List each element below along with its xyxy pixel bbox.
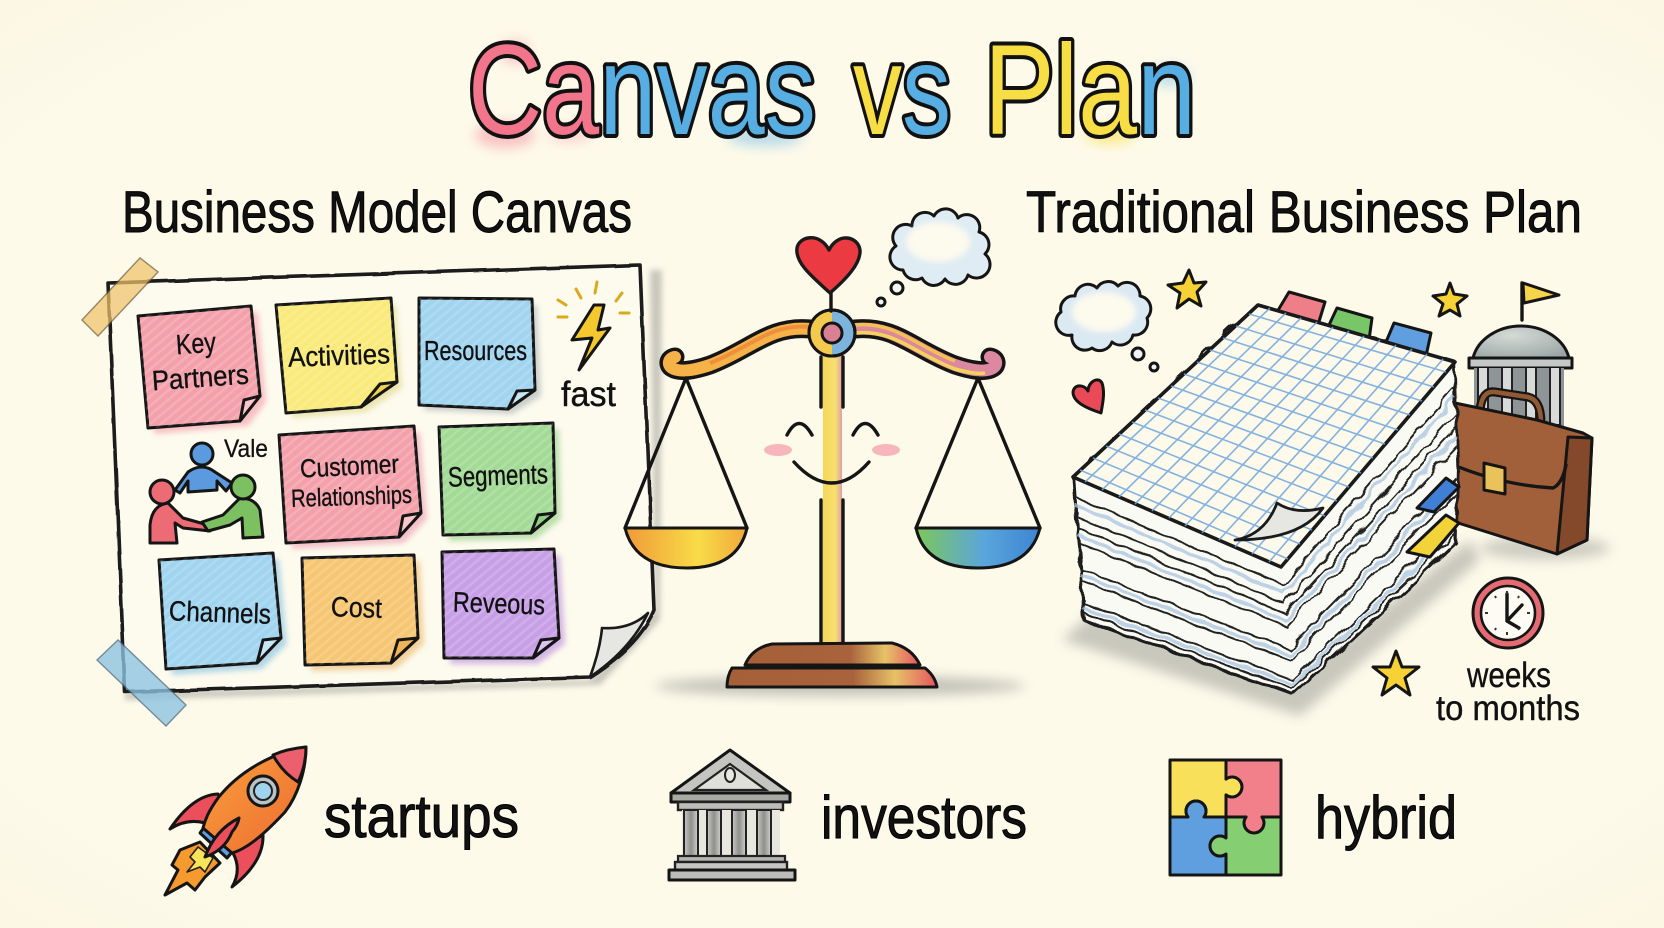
stack shadow [1062,540,1480,716]
icon: rocket [165,747,306,895]
scale base [727,643,937,687]
sticky: Customer Relationships: Customer [299,448,400,484]
sticky: Channels: Channels [168,595,271,630]
title: Canvas vs Plan: vs [853,19,951,162]
panel: business model canvas sheet [82,258,662,726]
index tab: pink [1277,292,1325,328]
heading: Traditional Business Plan: Traditional Business Plan [1026,180,1582,245]
scale beam [669,325,996,373]
left pan [625,378,747,568]
piece: yellow [1170,760,1242,817]
index tab: blue [1386,323,1431,356]
icon: brown briefcase [1449,392,1610,560]
label: fast: fast [561,375,616,414]
label: weeks to months: weeks [1466,656,1551,695]
sticky: Segments: Segments [447,458,548,493]
sticky: Channels [159,553,287,675]
sticky: Customer Relationships [279,426,427,549]
nose [273,747,306,782]
icon: clock [1473,578,1543,648]
icon: small heart [1073,380,1104,413]
icon: bank [669,750,795,880]
left fin [170,794,225,829]
icon: star right [1433,283,1467,316]
tape: bottom left [97,640,186,726]
sticky: Customer Relationships: Relationships [291,481,412,513]
body [203,747,306,853]
sticky: Reveous: Reveous [452,586,545,621]
sticky: Key Partners [138,306,266,434]
right pan [916,378,1040,568]
window [248,776,278,806]
scale shadow [655,676,1025,696]
title: Canvas vs Plan: Canvas [468,19,816,162]
icon: three people joining hands [150,435,268,543]
side tab: yellow [1407,515,1459,557]
curled sheet corner [590,613,648,677]
icon: star bottom [1373,651,1419,695]
center fin [205,818,239,857]
sheet outline [108,265,654,692]
scale post [821,352,843,644]
icon: lightning bolt with rays [558,282,629,370]
icon: domed government building [1469,283,1572,428]
icon: puzzle [1170,760,1281,875]
piece: green [1210,817,1281,875]
page curl on top sheet [1235,503,1323,540]
title: Canvas vs Plan: Plan [984,19,1196,162]
title: Canvas vs Plan [468,19,1196,162]
chart: smiling balance scale [625,209,1040,696]
label: weeks to months: to months [1436,689,1580,728]
smiling face [764,424,900,483]
icon: thought cloud left [1056,282,1158,371]
piece: blue [1170,801,1226,875]
right fin [232,835,263,887]
flame [165,842,220,895]
person: green [202,475,263,538]
label: startups: startups [324,783,519,850]
person: blue [175,443,232,493]
icon: thought cloud [877,209,990,306]
heading: Business Model Canvas: Business Model Canvas [122,180,632,245]
tape: top left [82,258,158,336]
sticky: Key Partners: Key [175,327,217,360]
piece: red [1226,760,1281,833]
icon: heart [797,238,860,293]
side tab: blue [1417,478,1459,512]
label: hybrid: hybrid [1315,784,1457,851]
sticky: Key Partners: Partners [151,359,250,396]
stem [829,292,833,311]
scale hub [809,310,855,356]
sticky: Segments [439,423,561,541]
panel: traditional business plan illustration [1056,270,1610,728]
sticky: Resources [419,298,541,414]
index tab: green [1329,308,1372,340]
top sheet with blue grid [1073,305,1455,567]
icon: star top [1168,270,1206,308]
person: red [150,480,210,543]
document stack [1074,305,1458,695]
sticky: Reveous [442,549,565,664]
sticky: Cost: Cost [330,591,383,624]
label: investors: investors [821,784,1027,851]
label: weeks to months [1436,656,1580,728]
sticky: Activities [276,298,402,418]
nozzle [200,826,233,858]
sticky: Cost [302,555,424,671]
sticky: Resources: Resources [424,335,527,366]
sticky: Activities: Activities [288,338,391,373]
label: Vale: Vale [224,435,268,463]
